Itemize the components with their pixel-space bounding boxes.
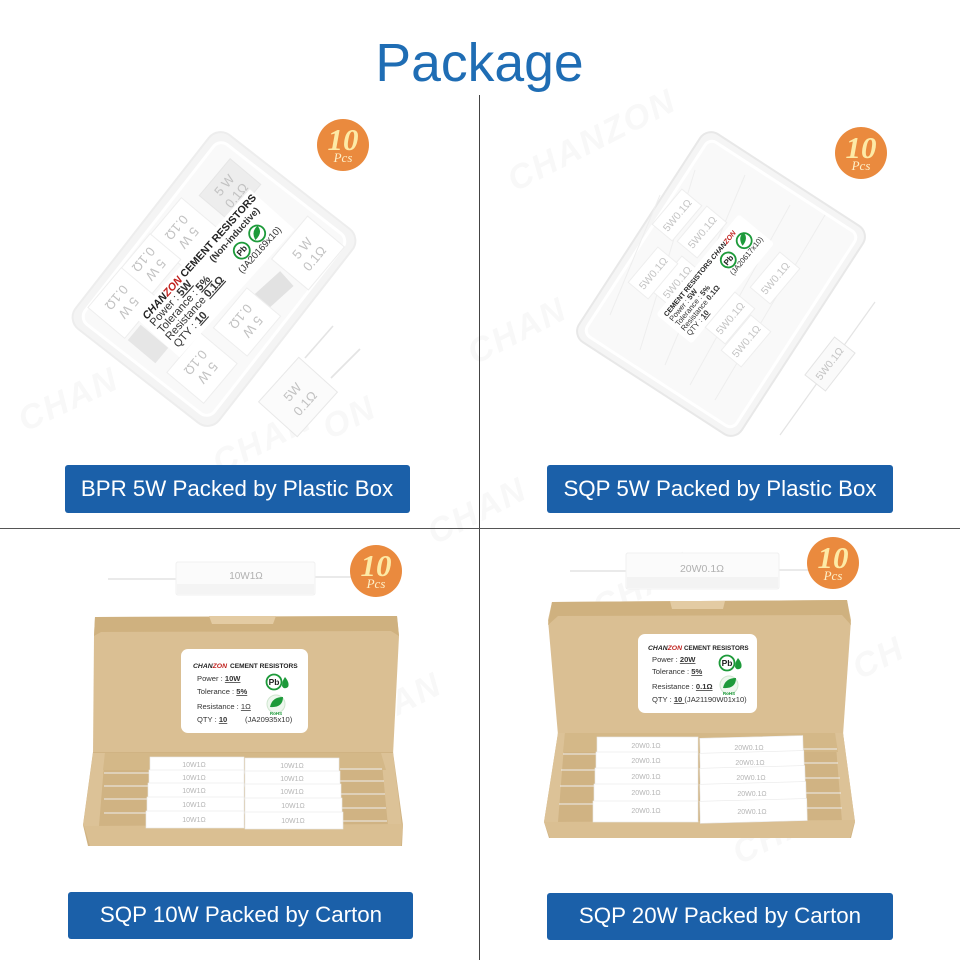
badge: 10 pcs: 10 — [846, 130, 876, 165]
resistors inside box: 5W0.1Ω — [661, 197, 695, 234]
loose resistor — [108, 562, 352, 595]
resistors inside box: 5W0.1Ω — [714, 300, 748, 337]
resistors inside box: 0.1Ω — [129, 244, 158, 275]
resistor rows: 10W1Ω — [280, 789, 304, 796]
badge: 10 pcs — [317, 119, 369, 171]
resistor rows: 10W1Ω — [281, 818, 305, 825]
resistor rows: 20W0.1Ω — [735, 760, 765, 767]
carton product label: CEMENT RESISTORS — [230, 663, 298, 670]
resistors inside box: 0.1Ω — [300, 243, 329, 274]
resistor rows — [559, 736, 842, 823]
resistors inside box: 5 W — [194, 359, 221, 387]
carton product label: QTY : 10 (JA21190W01x10) — [652, 695, 747, 704]
product label: (JA20617x10) — [728, 235, 765, 277]
resistors inside box: 5 W — [211, 171, 238, 199]
carton product label: Resistance : 0.1Ω — [652, 682, 713, 691]
panel: SQP 5W plastic box — [547, 127, 893, 513]
icon: lead free: Pb — [722, 253, 735, 267]
resistors inside box — [628, 189, 800, 367]
carton box — [83, 616, 403, 846]
plastic box — [67, 126, 361, 432]
icon: RoHS leaf: RoHS — [270, 711, 282, 716]
product label — [656, 214, 774, 344]
resistors inside box: 5W0.1Ω — [686, 214, 720, 251]
icon: lead free: Pb — [722, 658, 732, 668]
badge: 10 pcs: 10 — [328, 122, 358, 157]
icon: RoHS leaf — [734, 230, 755, 251]
carton product label — [638, 634, 757, 713]
resistor over label — [213, 288, 281, 356]
caption button — [65, 465, 410, 513]
badge: 10 pcs: Pcs — [333, 150, 352, 165]
loose resistor — [570, 553, 810, 589]
badge: 10 pcs: Pcs — [823, 568, 842, 583]
carton product label: CHANZON — [193, 663, 228, 670]
product label: (Non-inductive) — [208, 205, 262, 265]
product label: QTY : 10 — [685, 308, 711, 337]
badge: 10 pcs — [350, 545, 402, 597]
text: CHANZON — [501, 82, 683, 199]
resistors inside box: 0.1Ω — [222, 180, 251, 211]
text: CHAN — [461, 290, 573, 372]
badge: 10 pcs: Pcs — [366, 576, 385, 591]
loose resistor: 5W — [280, 379, 305, 404]
resistor rows: 10W1Ω — [281, 803, 305, 810]
product label: Resistance 0.1Ω — [679, 283, 722, 333]
badge: 10 pcs — [807, 537, 859, 589]
product label: (JA20169x10) — [236, 225, 284, 276]
resistor rows: 20W0.1Ω — [631, 758, 661, 765]
caption button: BPR 5W Packed by Plastic Box — [81, 476, 393, 501]
text: CH — [846, 629, 911, 687]
product label: Tolerance : 5% — [156, 273, 213, 336]
resistors inside box: 0.1Ω — [162, 212, 191, 243]
resistors inside box: 5W0.1Ω — [637, 255, 671, 292]
resistor rows: 20W0.1Ω — [737, 809, 767, 816]
resistor rows: 10W1Ω — [182, 788, 206, 795]
carton product label: Tolerance : 5% — [652, 667, 702, 676]
panel: BPR 5W plastic box — [65, 119, 410, 513]
carton product label: Tolerance : 5% — [197, 687, 247, 696]
caption button: SQP 20W Packed by Carton — [579, 903, 861, 928]
resistor rows: 20W0.1Ω — [631, 790, 661, 797]
loose resistor: 0.1Ω — [290, 388, 320, 419]
resistor over label: 5 W — [239, 313, 266, 341]
caption button: SQP 5W Packed by Plastic Box — [563, 476, 877, 501]
resistor under label — [652, 256, 702, 308]
panel: SQP 20W carton — [544, 537, 893, 940]
resistor rows: 20W0.1Ω — [737, 791, 767, 798]
text: CHAN — [421, 470, 533, 552]
resistor rows: 20W0.1Ω — [631, 774, 661, 781]
loose resistor: 10W1Ω — [229, 571, 263, 582]
resistor rows: 10W1Ω — [280, 763, 304, 770]
caption button — [547, 465, 893, 513]
loose resistor: 20W0.1Ω — [680, 563, 724, 575]
carton product label: CHANZON — [648, 645, 683, 652]
resistor rows: 20W0.1Ω — [631, 808, 661, 815]
product label: CEMENT RESISTORS CHANZON — [663, 229, 738, 318]
caption button — [547, 893, 893, 940]
resistor rows: 10W1Ω — [182, 817, 206, 824]
badge: 10 pcs: Pcs — [851, 158, 870, 173]
resistor rows: 20W0.1Ω — [736, 775, 766, 782]
product label: Power : 5W — [667, 286, 700, 323]
product label: QTY : 10 — [172, 309, 210, 350]
resistors inside box: 5 W — [175, 224, 202, 252]
resistor over label: 0.1Ω — [226, 301, 255, 332]
carton product label — [181, 649, 308, 733]
resistor under label: 5W0.1Ω — [661, 264, 695, 301]
resistor rows: 10W1Ω — [280, 776, 304, 783]
resistors inside box: 0.1Ω — [102, 282, 131, 313]
text: ON — [316, 388, 383, 447]
text: CHAN — [586, 545, 698, 627]
text: CHAN — [726, 790, 838, 872]
badge: 10 pcs: 10 — [360, 548, 392, 583]
resistor rows — [104, 757, 387, 829]
loose resistor — [259, 326, 360, 437]
product label: CHANZONCEMENT RESISTORS — [140, 192, 259, 322]
badge: 10 pcs: 10 — [818, 540, 848, 575]
carton product label: Power : 20W — [652, 655, 696, 664]
resistors inside box: 0.1Ω — [181, 347, 210, 378]
product label: Tolerance : 5% — [673, 283, 712, 328]
caption button — [68, 892, 413, 939]
resistor rows: 20W0.1Ω — [734, 745, 764, 752]
product label: Power : 5W — [148, 278, 195, 329]
carton box — [544, 600, 855, 838]
loose resistor — [780, 302, 875, 435]
text: CHAN — [336, 665, 448, 747]
resistors inside box: 5 W — [142, 256, 169, 284]
resistor rows: 10W1Ω — [182, 802, 206, 809]
title: Package — [375, 34, 584, 93]
carton product label: QTY : 10 — [197, 715, 227, 724]
carton product label: (JA20935x10) — [245, 715, 293, 724]
carton product label: CEMENT RESISTORS — [684, 645, 749, 652]
text: CHAN — [12, 360, 125, 439]
carton product label: Resistance : 1Ω — [197, 702, 251, 711]
plastic box — [572, 127, 870, 441]
caption button: SQP 10W Packed by Carton — [100, 902, 382, 927]
resistors inside box: 5W0.1Ω — [759, 260, 793, 297]
product label: Resistance 0.1Ω — [163, 274, 227, 343]
icon: RoHS leaf — [246, 222, 268, 245]
loose resistor: 5W0.1Ω — [814, 345, 847, 383]
resistor rows: 10W1Ω — [182, 775, 206, 782]
text: CHAN — [676, 337, 788, 419]
resistors inside box: 5W0.1Ω — [730, 323, 764, 360]
carton product label: Power : 10W — [197, 674, 241, 683]
icon: lead free: Pb — [234, 243, 249, 258]
panel: SQP 10W carton — [68, 545, 413, 939]
resistor rows: 10W1Ω — [182, 762, 206, 769]
badge: 10 pcs — [835, 127, 887, 179]
icon: lead free: Pb — [269, 677, 279, 687]
resistors inside box: 5 W — [289, 234, 316, 262]
icon: lead free — [230, 239, 253, 262]
text: CHAN — [206, 400, 318, 482]
resistor rows: 20W0.1Ω — [631, 743, 661, 750]
resistors inside box: 5 W — [115, 294, 142, 322]
icon: RoHS leaf: RoHS — [723, 691, 735, 696]
product label — [135, 189, 294, 357]
resistors inside box — [88, 159, 344, 403]
